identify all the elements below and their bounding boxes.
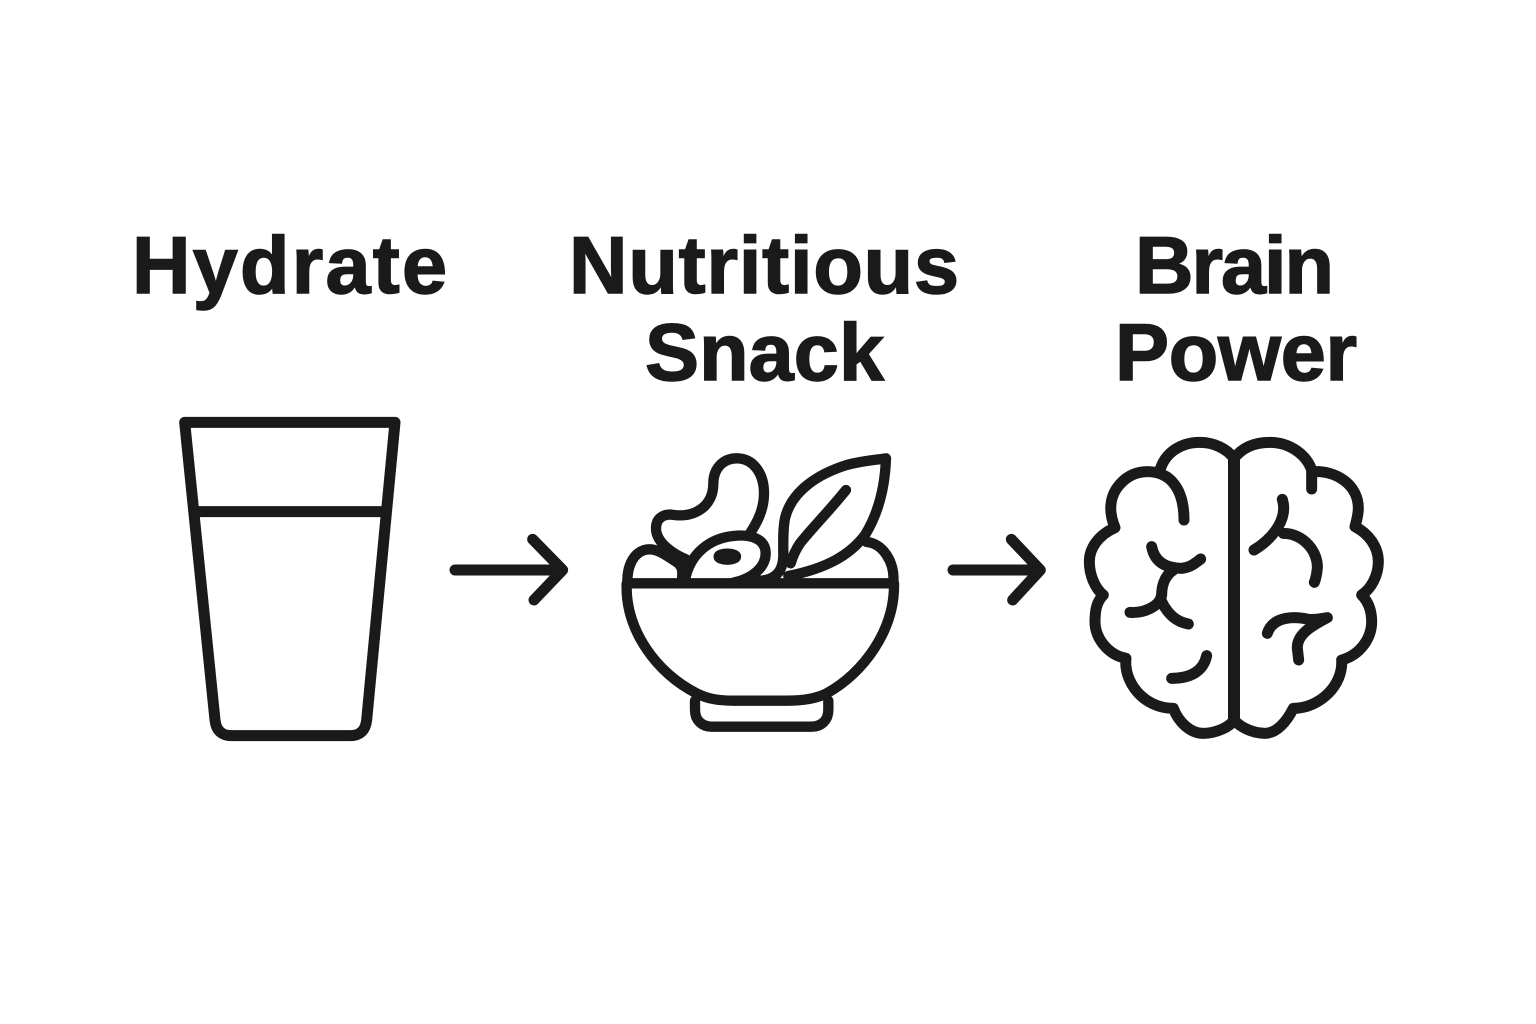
heading: Hydrate: Hydrate (132, 221, 447, 311)
right nut (867, 542, 893, 582)
left hemisphere outline (1089, 442, 1234, 733)
left folds (1130, 547, 1207, 678)
arrow: hydrate to snack (455, 539, 563, 600)
bowl foot (695, 701, 828, 727)
centre divide (1216, 458, 1252, 720)
leaf vein (791, 490, 846, 563)
bowl body (627, 583, 894, 701)
bean (685, 536, 766, 583)
icon: snack bowl with nuts and leaf (627, 458, 894, 727)
right hemisphere outline (1234, 442, 1378, 733)
heading: Nutritious Snack: Nutritious (569, 221, 959, 311)
heading: Brain Power: Brain (1135, 221, 1334, 311)
heading: Nutritious Snack (569, 221, 959, 398)
arrow: snack to brain (953, 539, 1040, 600)
heading: Brain Power: Power (1115, 308, 1357, 398)
right folds (1254, 499, 1327, 660)
icon: brain (1089, 442, 1378, 733)
heading: Nutritious Snack: Snack (645, 308, 885, 398)
icon: glass of water (185, 422, 395, 736)
cashew (656, 458, 764, 559)
heading: Brain Power (1115, 221, 1357, 398)
left nut (627, 549, 682, 582)
leaf (760, 458, 886, 581)
bean seed (719, 554, 736, 560)
